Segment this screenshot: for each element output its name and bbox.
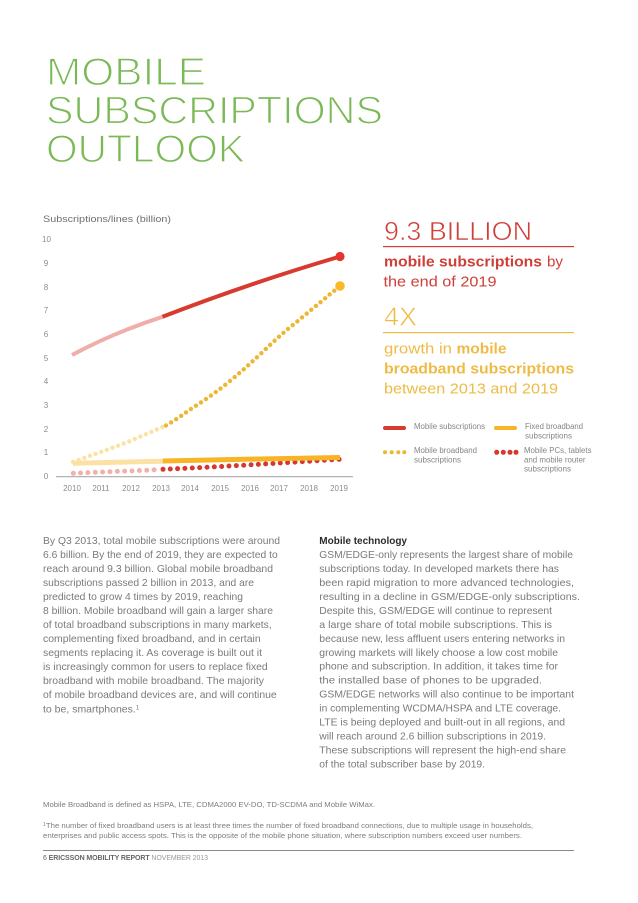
- text block: left column: 8 billion. Mobile broadband will gain a larger share: [43, 605, 273, 617]
- series: mobile subscriptions historic: [72, 317, 163, 355]
- section body: the installed base of phones to be upgraded.: [319, 675, 542, 687]
- y axis labels: 3: [44, 401, 49, 410]
- series: mobile PCs, tablets and routers historic: [73, 470, 159, 473]
- series: mobile subscriptions forecast: [162, 252, 345, 317]
- x axis labels: 2016: [241, 484, 259, 493]
- chart: subscriptions and lines in billions: [42, 214, 353, 493]
- y axis labels: 5: [44, 354, 49, 363]
- text block: left column: of mobile broadband devices are, and will continue: [43, 689, 277, 701]
- callout: 9.3 billion: [383, 218, 574, 291]
- x axis labels: 2017: [270, 484, 288, 493]
- y axis labels: 8: [44, 283, 49, 292]
- callout: 9.3 billion: 9.3 BILLION: [384, 218, 532, 246]
- y axis labels: 4: [44, 377, 49, 386]
- text block: left column: predicted to grow 4 times by 2019, reaching: [43, 591, 243, 603]
- y axis labels: 6: [44, 330, 49, 339]
- footnote: enterprises and public access spots. This is the opposite of the mobile phone situation, where subscription numbers exceed user numbers.: [43, 831, 522, 840]
- text block: left column: reach around 9.3 billion. Global mobile broadband: [43, 563, 273, 575]
- footer: 6 ERICSSON MOBILITY REPORT NOVEMBER 2013: [43, 855, 208, 862]
- series: fixed broadband forecast: [163, 458, 340, 461]
- callout: 9.3 billion: by: [547, 254, 564, 271]
- legend: [383, 422, 592, 474]
- legend: fixed broadband: [496, 422, 583, 441]
- section heading: Mobile technology: [319, 535, 407, 547]
- y axis labels: 9: [44, 259, 49, 268]
- x axis labels: 2013: [152, 484, 170, 493]
- section body: of the total subscriber base by 2019.: [319, 758, 485, 770]
- section body: resulting in a decline in GSM/EDGE-only subscriptions.: [319, 591, 580, 603]
- section body: in complementing WCDMA/HSPA and LTE coverage.: [319, 703, 561, 715]
- y axis labels: 1: [44, 448, 49, 457]
- legend: fixed broadband: Fixed broadband: [525, 422, 583, 431]
- section body: will reach around 2.6 billion subscriptions in 2019.: [318, 731, 546, 743]
- callout: 4X growth: [383, 304, 574, 397]
- text block: left column: [43, 535, 280, 715]
- text block: left column: is increasingly common for users to replace fixed: [43, 661, 268, 673]
- section body: LTE is being deployed and built-out in all regions, and: [319, 717, 565, 729]
- text block: left column: 6.6 billion. By the end of 2019, they are expected to: [43, 549, 278, 561]
- callout: 9.3 billion: the end of 2019: [384, 274, 496, 291]
- section body: been rapid migration to more advanced technologies,: [319, 577, 574, 589]
- section body: subscriptions today. In developed markets there has: [319, 563, 559, 575]
- text block: left column: of total broadband subscriptions in many markets,: [43, 619, 272, 631]
- footer rule: [43, 850, 574, 851]
- text block: left column: broadband with mobile broadband. The majority: [43, 675, 265, 687]
- callout: 4X growth: between 2013 and 2019: [384, 380, 558, 397]
- callout: 4X growth: broadband subscriptions: [384, 360, 574, 377]
- legend: fixed broadband: subscriptions: [525, 432, 572, 441]
- x axis labels: 2010: [63, 484, 81, 493]
- legend: mobile subscriptions: [385, 422, 485, 431]
- x axis line: [56, 476, 353, 478]
- series: mobile broadband historic: [73, 427, 163, 462]
- text block: left column: 1: [136, 705, 140, 711]
- x axis labels: 2011: [92, 484, 110, 493]
- section body: phone and subscription. In addition, it takes time for: [319, 661, 559, 673]
- x axis labels: 2018: [300, 484, 318, 493]
- legend: mobile broadband: [383, 446, 477, 465]
- footnote: [43, 821, 533, 840]
- legend: mobile PCs, tablets and routers: Mobile PCs, tablets: [524, 446, 592, 455]
- legend: mobile PCs, tablets and routers: [494, 446, 592, 474]
- x axis labels: 2012: [122, 484, 140, 493]
- series: mobile PCs, tablets and routers forecast: [163, 459, 340, 469]
- section body: because new, less affluent users entering networks in: [319, 633, 565, 645]
- y axis labels: 0: [44, 472, 49, 481]
- x axis labels: 2015: [211, 484, 229, 493]
- text block: left column: By Q3 2013, total mobile subscriptions were around: [43, 535, 280, 547]
- title: [46, 51, 383, 171]
- x axis labels: 2014: [181, 484, 199, 493]
- section body: GSM/EDGE networks will also continue to be important: [319, 689, 574, 701]
- text block: mobile technology: [318, 535, 580, 770]
- legend: mobile broadband: Mobile broadband: [414, 446, 477, 455]
- section body: a large share of total mobile subscriptions. This is: [319, 619, 552, 631]
- y axis labels: 7: [44, 306, 49, 315]
- section body: Despite this, GSM/EDGE will continue to represent: [319, 605, 552, 617]
- series: fixed broadband historic: [73, 461, 163, 463]
- y axis labels: 10: [42, 235, 51, 244]
- title: OUTLOOK: [46, 128, 245, 171]
- legend: mobile subscriptions: Mobile subscriptions: [414, 422, 485, 431]
- text block: left column: subscriptions passed 2 billion in 2013, and are: [43, 577, 254, 589]
- text block: left column: segments replacing it. As coverage is built out it: [43, 647, 262, 659]
- chart heading: Subscriptions/lines (billion): [43, 214, 171, 225]
- text block: left column: complementing fixed broadband, and in certain: [43, 633, 261, 645]
- callout: 4X growth: mobile: [456, 340, 506, 357]
- text block: left column: to be, smartphones.: [43, 703, 136, 715]
- y axis labels: [42, 235, 51, 481]
- section body: GSM/EDGE-only represents the largest share of mobile: [319, 549, 573, 561]
- x axis labels: 2019: [330, 484, 348, 493]
- callout: 4X growth: 4X: [384, 304, 417, 332]
- legend: mobile PCs, tablets and routers: and mobile router: [524, 456, 586, 465]
- footnote: 1: [43, 822, 46, 828]
- title: MOBILE: [46, 51, 206, 94]
- section body: These subscriptions will represent the high-end share: [319, 745, 566, 757]
- title: SUBSCRIPTIONS: [46, 90, 383, 132]
- x axis labels: [63, 484, 348, 493]
- footnote: The number of fixed broadband users is at least three times the number of fixed broadband connections, due to multiple usage in households,: [46, 821, 533, 830]
- y axis labels: 2: [44, 425, 49, 434]
- callout: 9.3 billion: mobile subscriptions: [384, 254, 542, 271]
- section body: [318, 549, 580, 770]
- series: mobile broadband forecast: [166, 281, 345, 426]
- section body: growing markets will likely choose a low cost mobile: [319, 647, 558, 659]
- note: mobile broadband definition: Mobile Broadband is defined as HSPA, LTE, CDMA2000 EV-DO, TD-SCDMA and Mobile WiMax.: [43, 800, 375, 809]
- legend: mobile PCs, tablets and routers: subscriptions: [524, 465, 571, 474]
- legend: mobile broadband: subscriptions: [414, 456, 461, 465]
- callout: 4X growth: growth in: [384, 340, 452, 357]
